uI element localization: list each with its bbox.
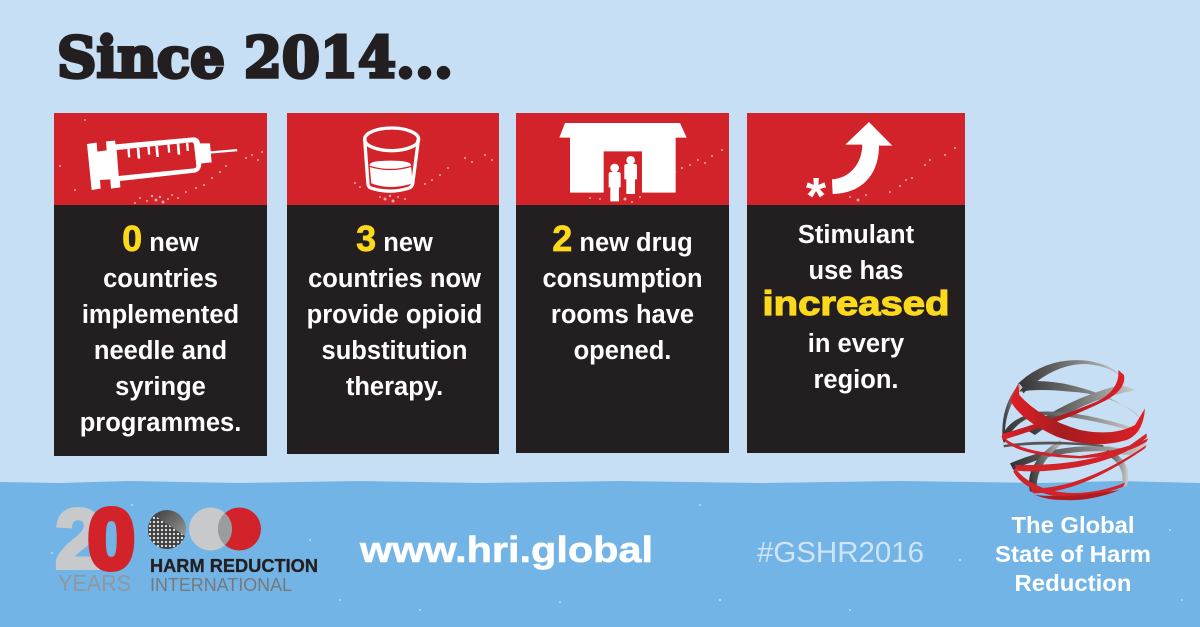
logo: Harm Reduction International: HARM REDUCTION <box>150 556 318 576</box>
statement: 2 new drug consumption rooms <box>542 218 703 365</box>
website url: www.hri.global <box>359 529 653 570</box>
speckle <box>59 119 263 204</box>
statement: stimulant use increased: use has <box>809 257 903 285</box>
statement: 3 new countries: substitution <box>322 337 467 365</box>
panel: needle and syringe programmes <box>54 113 267 456</box>
statement: 0 new countries: implemented <box>82 301 239 329</box>
caption: The Global State of Harm Reduction: The Global <box>1012 512 1134 538</box>
logo: 20 years: 2 <box>55 492 102 586</box>
panel: stimulant use <box>747 113 965 453</box>
logo: Harm Reduction International: INTERNATIONAL <box>150 575 292 595</box>
statement: 0 new countries: syringe <box>115 373 206 401</box>
statement: 2 new drug consumption rooms: consumption <box>542 265 703 293</box>
icon: syringe <box>87 137 237 190</box>
statement: stimulant use increased: region. <box>813 366 899 394</box>
statement: 2 new drug consumption rooms: 2 new drug <box>552 218 693 259</box>
water band <box>0 481 1200 627</box>
logo: 20 years: YEARS <box>58 570 131 596</box>
hashtag: #GSHR2016 <box>757 537 924 569</box>
statement: 3 new countries: provide opioid <box>307 301 482 329</box>
statement: 3 new countries: therapy. <box>346 373 443 401</box>
speckle <box>354 154 493 202</box>
statement: 0 new countries: programmes. <box>80 409 241 437</box>
statement: 2 new drug consumption rooms: opened. <box>574 337 671 365</box>
icon: asterisk: * <box>806 168 827 226</box>
icon: building with people <box>559 123 687 201</box>
statement: stimulant use increased <box>762 221 950 394</box>
water specks <box>51 504 1183 611</box>
speckle <box>589 149 723 203</box>
speckle <box>849 147 956 202</box>
statement: 0 new countries <box>80 218 241 437</box>
statement: 0 new countries: needle and <box>94 337 227 365</box>
icon: ribbon globe <box>1002 360 1148 500</box>
statement: 3 new countries: countries now <box>308 265 481 293</box>
caption: The Global State of Harm Reduction <box>995 512 1151 596</box>
statement: 0 new countries: 0 new <box>122 218 199 259</box>
panel: drug consumption rooms <box>516 113 729 453</box>
title: Since 2014... <box>57 25 453 91</box>
statement: stimulant use increased: in every <box>808 330 905 358</box>
panel: opioid substitution therapy <box>287 113 499 454</box>
statement: 2 new drug consumption rooms: rooms have <box>551 301 694 329</box>
caption: The Global State of Harm Reduction: State of Harm <box>995 541 1151 567</box>
icon: glass <box>365 128 419 191</box>
logo: 20 years: 0 <box>88 492 135 586</box>
icon: curved arrow <box>832 122 892 194</box>
statement: 0 new countries: countries <box>103 265 218 293</box>
statement: 3 new countries: 3 new <box>356 218 433 259</box>
caption: The Global State of Harm Reduction: Reduction <box>1014 570 1132 596</box>
statement: stimulant use increased: increased <box>762 285 950 323</box>
logo: 20 years <box>55 492 135 596</box>
statement: stimulant use increased: Stimulant <box>798 221 915 249</box>
logo: Harm Reduction International <box>148 508 318 595</box>
statement: 3 new countries <box>307 218 482 401</box>
